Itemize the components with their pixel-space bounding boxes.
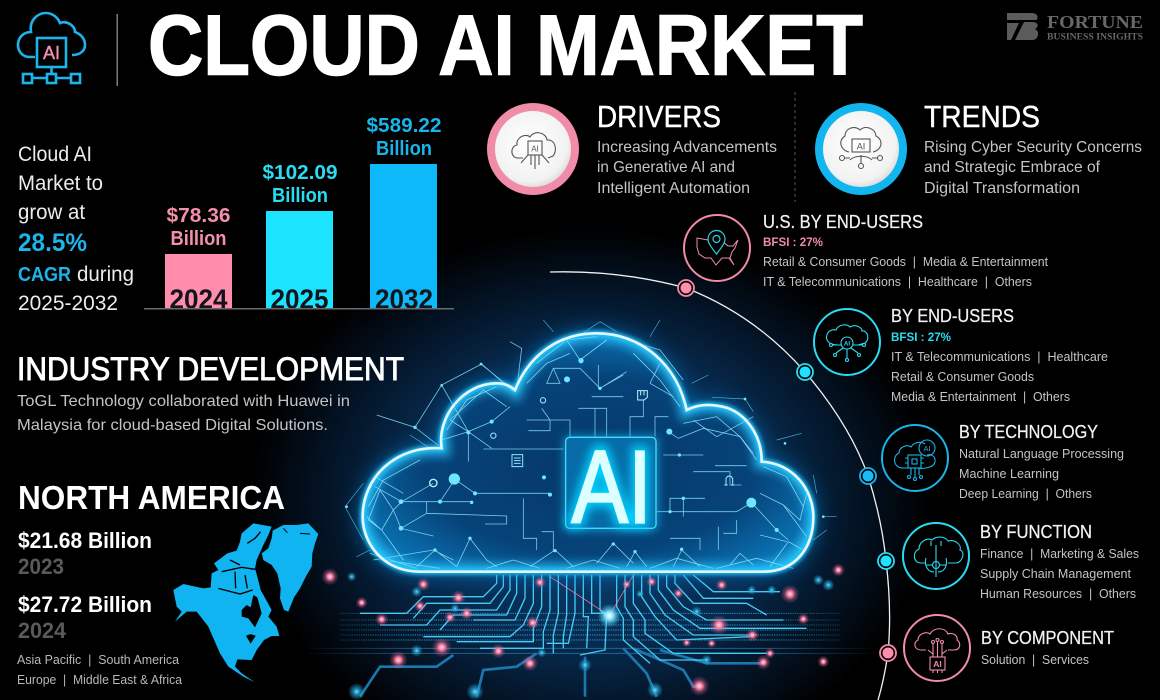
trends heading: TRENDS	[924, 99, 1040, 134]
trends text: and Strategic Embrace of	[924, 159, 1101, 176]
bar chart: market size by year: Billion	[170, 227, 226, 250]
growth statement text: 2025-2032	[18, 292, 118, 315]
segment: by end-users	[814, 306, 1108, 404]
drivers heading: DRIVERS	[597, 99, 721, 134]
icon: US map pin	[684, 215, 750, 281]
logo: Fortune Business Insights: FORTUNE	[1047, 12, 1143, 32]
north america values: $27.72 Billion	[18, 592, 152, 617]
icon: cloud with chip: AI	[933, 659, 942, 669]
north america values: 2024	[18, 618, 67, 643]
cloud network lines	[345, 320, 837, 568]
segment: by component: Solution | Services	[981, 652, 1089, 667]
title: CLOUD AI MARKET	[148, 0, 863, 94]
segment: by function: BY FUNCTION	[980, 522, 1092, 542]
segment: U.S. by end-users: Retail & Consumer Goods | Media & Entertainment	[763, 254, 1048, 269]
other regions	[17, 652, 183, 687]
segment: by end-users: BFSI : 27%	[891, 330, 951, 344]
drivers text: Increasing Advancements	[597, 139, 777, 156]
bar chart: market size by year: 2025	[270, 284, 328, 314]
trends text: Rising Cyber Security Concerns	[924, 139, 1142, 156]
circuit glow dots	[321, 563, 845, 700]
bar chart: market size by year: $78.36	[166, 204, 230, 227]
bar chart: market size by year: $102.09	[262, 161, 338, 184]
segment: by end-users: Retail & Consumer Goods	[891, 369, 1034, 384]
north america values: 2023	[18, 554, 64, 579]
industry development text	[17, 393, 350, 434]
divider between drivers and trends	[794, 92, 796, 202]
segment: by technology: BY TECHNOLOGY	[959, 422, 1098, 442]
cloud glow	[363, 333, 813, 572]
cloud outline	[363, 333, 813, 572]
industry development text: Malaysia for cloud-based Digital Solutions.	[17, 417, 328, 434]
growth statement text: during	[77, 263, 134, 286]
icon: AI cloud network	[814, 309, 880, 375]
map: North America	[173, 523, 318, 682]
header divider	[116, 14, 118, 86]
segment: U.S. by end-users: IT & Telecommunications | Healthcare | Others	[763, 274, 1032, 289]
segment: U.S. by end-users: BFSI : 27%	[763, 235, 823, 249]
segment: by end-users: BY END-USERS	[891, 306, 1014, 326]
drivers icon: AI	[531, 144, 539, 154]
header icon: cloud AI network	[18, 13, 85, 83]
header icon: cloud AI network: AI	[43, 43, 60, 63]
segment: by function: Supply Chain Management	[980, 566, 1131, 581]
trends text: Digital Transformation	[924, 180, 1080, 197]
growth statement text: Market to	[18, 172, 103, 195]
segment: by technology: Deep Learning | Others	[959, 486, 1092, 501]
industry development text: ToGL Technology collaborated with Huawei in	[17, 393, 350, 410]
segment connector arc	[550, 272, 890, 700]
icon: cloud brain	[903, 523, 969, 589]
bar chart: market size by year: 2032	[375, 284, 433, 314]
segment: U.S. by end-users: U.S. BY END-USERS	[763, 212, 923, 232]
icon: cloud with chip	[904, 615, 970, 681]
AI chip box: AI	[572, 428, 652, 544]
segment: by function: Finance | Marketing & Sales	[980, 546, 1139, 561]
icon: cloud chip: AI	[923, 444, 931, 453]
trends text	[924, 139, 1142, 197]
north america values	[18, 528, 152, 643]
growth statement text: CAGR	[18, 264, 71, 286]
north america values: $21.68 Billion	[18, 528, 152, 553]
bar chart: market size by year: 2024	[170, 284, 228, 314]
bar chart: market size by year	[144, 114, 454, 314]
segment: by technology: Natural Language Processing	[959, 446, 1124, 461]
central illustration: glowing AI cloud on circuit board	[307, 320, 873, 700]
drivers text	[597, 139, 777, 197]
bar chart: market size by year: $589.22	[366, 114, 442, 137]
icon: cloud chip	[882, 425, 948, 491]
growth statement text: grow at	[18, 201, 85, 224]
trends icon: AI	[857, 142, 865, 152]
bar chart: market size by year: Billion	[376, 137, 432, 160]
segment: by end-users: IT & Telecommunications | Healthcare	[891, 349, 1108, 364]
segment: by component: BY COMPONENT	[981, 628, 1114, 648]
drivers icon	[487, 103, 579, 195]
growth statement text: 28.5%	[18, 229, 87, 257]
segment: by end-users: Media & Entertainment | Others	[891, 389, 1070, 404]
other regions: Europe | Middle East & Africa	[17, 672, 183, 687]
segment: U.S. by end-users	[684, 212, 1048, 289]
bar chart: market size by year: Billion	[272, 184, 328, 207]
segment: by technology	[882, 422, 1124, 501]
arc nodes	[678, 280, 896, 661]
segment: by function	[903, 522, 1139, 601]
industry development heading: INDUSTRY DEVELOPMENT	[17, 351, 404, 387]
drivers text: Intelligent Automation	[597, 180, 750, 197]
segment: by component	[904, 615, 1114, 681]
north america heading: NORTH AMERICA	[18, 479, 285, 516]
logo: Fortune Business Insights: BUSINESS INSIGHTS	[1047, 32, 1143, 42]
AI chip box: AI	[572, 428, 652, 544]
growth statement text	[18, 143, 134, 315]
drivers text: in Generative AI and	[597, 159, 735, 176]
logo: Fortune Business Insights	[1007, 12, 1143, 42]
circuit board traces	[307, 558, 873, 697]
growth statement text: Cloud AI	[18, 143, 92, 166]
trends icon	[815, 103, 907, 195]
icon: AI cloud network: AI	[844, 342, 850, 348]
other regions: Asia Pacific | South America	[17, 652, 180, 667]
segment: by function: Human Resources | Others	[980, 586, 1136, 601]
cloud body	[363, 333, 813, 572]
segment: by technology: Machine Learning	[959, 466, 1059, 481]
